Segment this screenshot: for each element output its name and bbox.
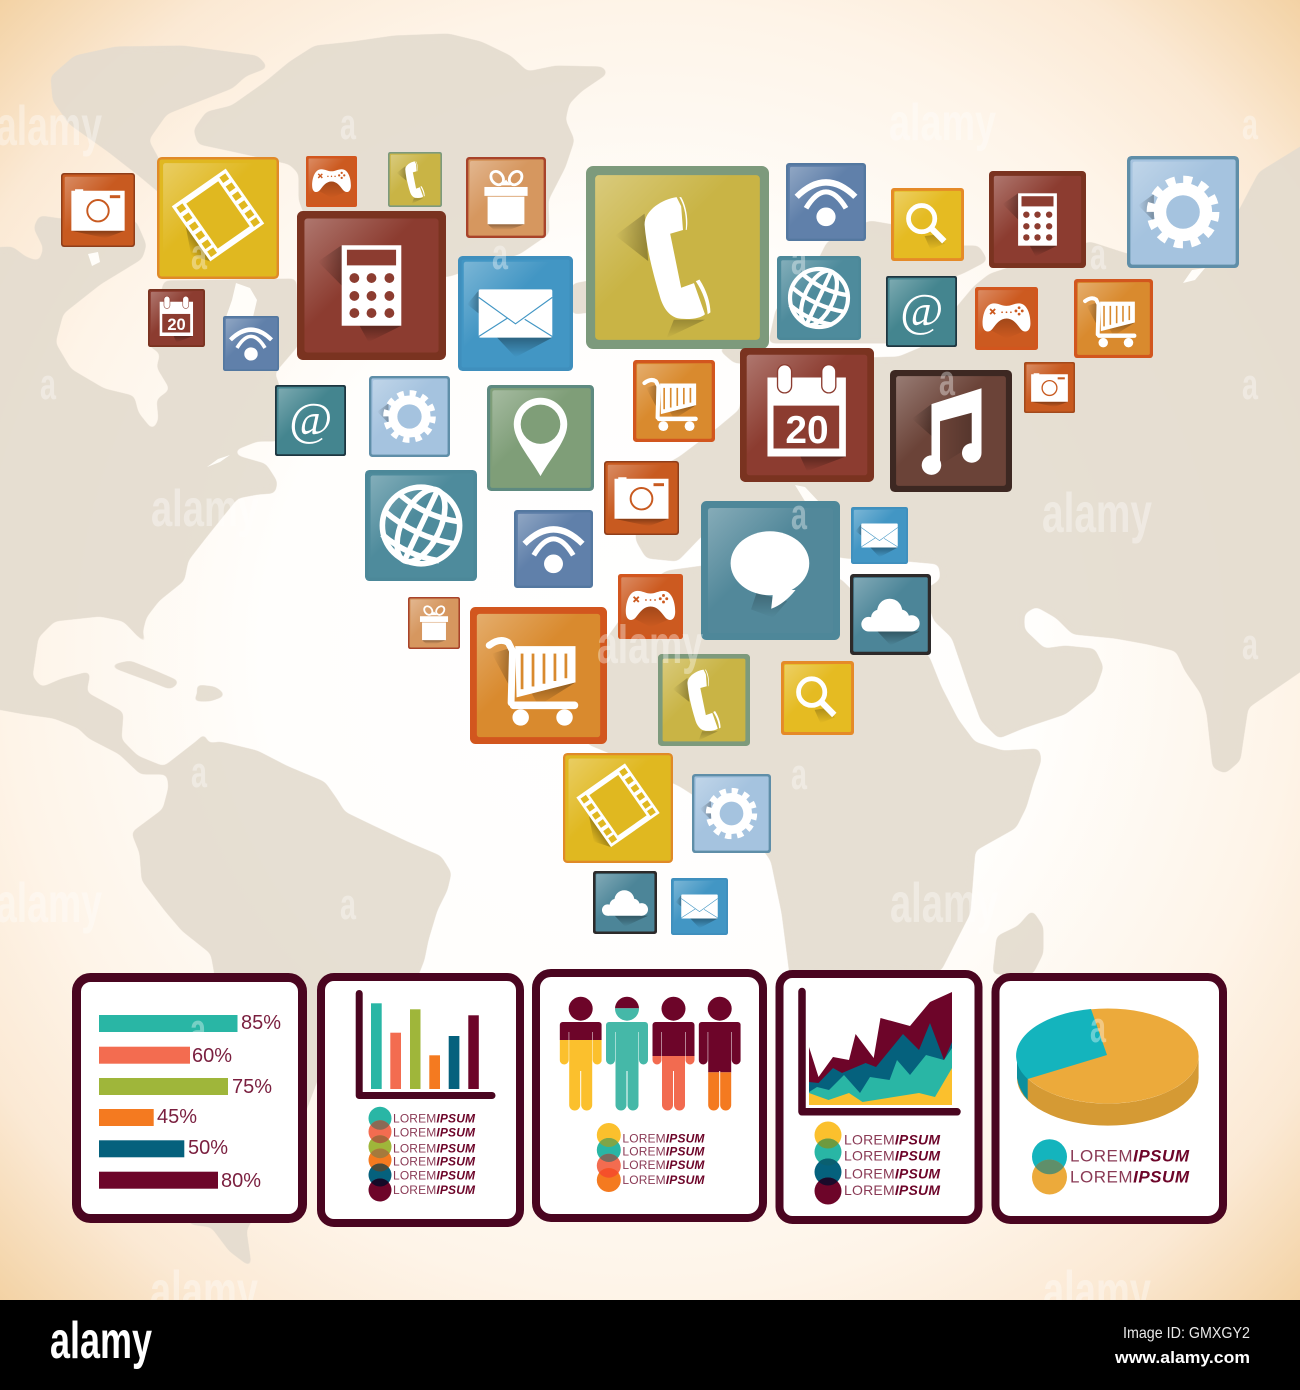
watermarks: alamy <box>0 94 102 157</box>
watermarks: alamy <box>889 94 996 152</box>
icon tile: search <box>781 661 854 735</box>
watermarks: a <box>1090 230 1106 279</box>
watermarks: a <box>190 1005 206 1054</box>
map: greenland <box>52 47 266 200</box>
bar 85%: 85% <box>241 1012 281 1034</box>
legend: LOREMIPSUM <box>844 1131 940 1147</box>
icon tile: large calendar: 20 <box>785 409 829 452</box>
icon tile: cloud <box>593 871 657 934</box>
panel: area chart <box>780 974 978 1220</box>
watermarks: alamy <box>150 1259 258 1322</box>
legend: LOREMIPSUM <box>1070 1168 1190 1187</box>
watermarks: alamy <box>151 480 259 538</box>
icon tile: mail <box>671 878 728 935</box>
legend: LOREMIPSUM <box>622 1145 705 1159</box>
icon tile: cart <box>633 360 715 442</box>
image id: Image ID: GMXGY2 <box>1123 1325 1250 1342</box>
person orange <box>698 996 741 1110</box>
icon tile: wifi <box>514 510 593 588</box>
icon tile: globe <box>777 256 861 340</box>
legend <box>597 1123 705 1192</box>
icon tile: mail <box>458 256 573 371</box>
chart axes <box>802 992 957 1112</box>
panel: column chart <box>321 977 520 1223</box>
map: madagascar <box>994 912 1042 973</box>
panel: people chart <box>536 973 763 1218</box>
icon tile: game controller <box>975 287 1038 350</box>
bar 60% <box>99 1045 232 1067</box>
legend: LOREMIPSUM <box>393 1168 476 1182</box>
bar 45% <box>99 1106 197 1128</box>
map: small northern island <box>573 280 600 313</box>
icon tile: cart <box>1074 279 1153 358</box>
icon tile: large phone <box>586 166 769 349</box>
icon tile: search <box>891 188 964 261</box>
person yellow <box>560 996 602 1110</box>
legend: LOREMIPSUM <box>844 1148 940 1164</box>
icon tile: gear <box>1127 156 1239 268</box>
icon tile: film <box>563 753 673 863</box>
legend: LOREMIPSUM <box>393 1183 476 1197</box>
legend: LOREMIPSUM <box>844 1166 940 1182</box>
icon tile: game controller <box>618 574 683 639</box>
watermarks: a <box>791 490 807 539</box>
watermarks: a <box>791 750 807 799</box>
panel: pie chart <box>996 977 1223 1220</box>
person coral <box>652 996 694 1110</box>
bar 75% <box>99 1076 272 1098</box>
watermarks: a <box>1242 360 1258 409</box>
legend: LOREMIPSUM <box>393 1112 476 1126</box>
icon tile: wifi <box>223 316 279 371</box>
watermarks: a <box>1242 100 1258 149</box>
legend: LOREMIPSUM <box>622 1173 705 1187</box>
watermarks: a <box>1090 1003 1106 1052</box>
watermarks: a <box>191 230 207 279</box>
stacked areas <box>809 992 952 1105</box>
watermarks: a <box>1242 620 1258 669</box>
icon tile: gift <box>466 157 546 238</box>
3d pie <box>1016 1008 1199 1126</box>
watermarks: a <box>340 880 356 929</box>
icon tile: calculator <box>989 171 1086 268</box>
icon tile: phone <box>658 654 750 746</box>
watermarks: a <box>492 230 508 279</box>
bar 80%: 80% <box>221 1170 261 1192</box>
icon tile: wifi <box>786 163 866 241</box>
map: hispaniola <box>194 686 224 700</box>
map: arctic and northern land <box>195 35 606 280</box>
website: www.alamy.com <box>1114 1348 1250 1367</box>
icon tile: gift <box>408 597 460 649</box>
watermarks: a <box>791 235 807 284</box>
map: hudson inlet and slivers <box>88 252 1205 503</box>
alamy logo: alamy <box>50 1312 152 1370</box>
watermarks: alamy <box>0 871 102 934</box>
footer bar <box>0 1300 1300 1390</box>
watermarks: alamy <box>597 615 703 675</box>
icon tile: large cart <box>470 607 607 744</box>
bar 80% <box>99 1170 261 1192</box>
legend: LOREMIPSUM <box>393 1155 476 1169</box>
map: eurasia <box>637 130 1300 772</box>
icon tile: large calendar <box>740 348 874 482</box>
bar 60%: 60% <box>192 1045 232 1067</box>
columns <box>371 1003 479 1089</box>
legend <box>368 1107 476 1202</box>
icon tile: at sign: @ <box>900 285 943 337</box>
icon tile: phone <box>388 152 442 207</box>
watermarks: a <box>191 748 207 797</box>
map: americas <box>0 217 450 1265</box>
watermarks: alamy <box>1042 481 1152 544</box>
legend: LOREMIPSUM <box>393 1126 476 1140</box>
icon tile: music <box>890 370 1012 492</box>
watermarks: a <box>40 360 56 409</box>
watermarks: alamy <box>1043 1259 1151 1322</box>
watermarks: a <box>939 356 955 405</box>
icon tile: calendar: 20 <box>167 315 186 334</box>
icon tile: map pin <box>487 385 594 491</box>
icon tile: film <box>157 157 279 279</box>
icon tile: calendar <box>148 289 205 347</box>
icon tile: at sign: @ <box>289 394 332 446</box>
map: scandinavia <box>770 222 986 342</box>
legend: LOREMIPSUM <box>622 1131 705 1145</box>
map: africa <box>588 567 1040 975</box>
icon tile: globe <box>365 470 477 581</box>
map: cuba <box>112 662 178 688</box>
legend <box>814 1122 940 1204</box>
panel: horizontal bars <box>76 978 302 1218</box>
icon tile: game controller <box>306 156 357 207</box>
legend: LOREMIPSUM <box>622 1158 705 1172</box>
watermarks: a <box>340 100 356 149</box>
legend <box>1032 1139 1190 1194</box>
chart axes <box>359 994 492 1096</box>
icon tile: calculator <box>297 211 446 360</box>
legend: LOREMIPSUM <box>844 1182 940 1198</box>
map: europe islet <box>720 349 760 362</box>
bar 45%: 45% <box>157 1106 197 1128</box>
icon tiles <box>61 152 1239 935</box>
icon tile: camera <box>1024 362 1075 413</box>
icon tile: gear <box>369 376 450 457</box>
icon tile: at sign <box>886 276 957 347</box>
bar 85% <box>99 1012 281 1034</box>
icon tile: speech bubble <box>701 501 840 640</box>
icon tile: at sign <box>275 385 346 456</box>
icon tile: cloud <box>850 574 931 655</box>
watermarks: alamy <box>890 871 998 934</box>
icon tile: mail <box>851 507 908 564</box>
legend: LOREMIPSUM <box>1070 1147 1190 1166</box>
legend: LOREMIPSUM <box>393 1141 476 1155</box>
bar 75%: 75% <box>232 1076 272 1098</box>
person teal <box>606 996 648 1110</box>
bar 50%: 50% <box>188 1137 228 1159</box>
bar 50% <box>99 1137 228 1159</box>
icon tile: camera <box>61 173 135 247</box>
icon tile: camera <box>604 461 679 535</box>
icon tile: gear <box>692 774 771 853</box>
